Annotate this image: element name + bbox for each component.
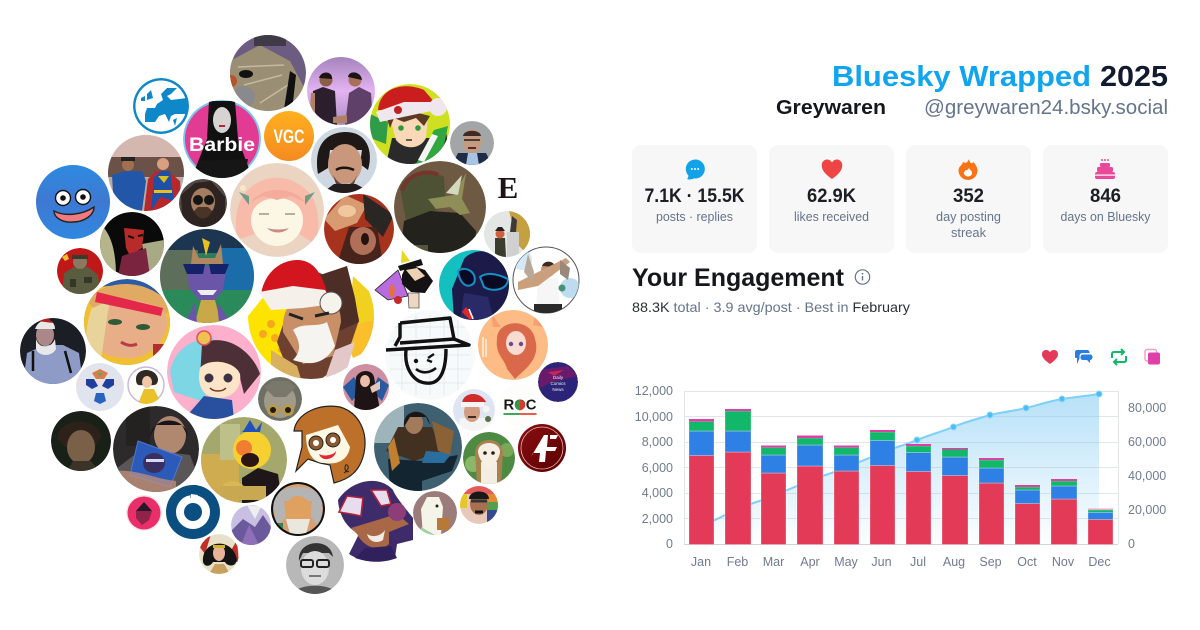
right axis labels [1128,401,1166,551]
panel: days on Bluesky [1043,145,1168,253]
avatar: grayscale person [286,536,344,594]
avatar: bearded man sunglasses [179,179,227,227]
left axis labels: 0 [666,537,673,551]
avatar: VGC [264,111,314,161]
avatar: Superman duo [108,135,184,211]
panel: posts and replies [632,145,757,253]
month labels: Aug [943,555,965,569]
avatar: pirate cartoon [375,250,433,308]
avatar: Miles Morales [338,481,413,562]
title: 2025 [1100,61,1168,93]
cumulative points [914,391,1102,443]
month labels: May [834,555,859,569]
handle: @greywaren24.bsky.social [924,97,1168,119]
avatar: wonder woman [199,534,239,574]
chart: engagement by month [635,384,1166,569]
avatar: VGC: VGC [273,127,305,148]
panel: avatar bubble cluster [20,35,580,594]
month labels: Jul [910,555,926,569]
heading: Your Engagement: Your Engagement [632,264,845,292]
avatar: Darth Vader sunglasses [439,250,509,320]
avatar: Barbie: Barbie [189,135,255,156]
avatar: red blurry photo [324,194,394,264]
avatar: yellow puppet [201,417,287,504]
month labels: Apr [800,555,820,569]
avatar: red demon [100,212,164,276]
stat value: 62.9K [807,186,856,207]
bar: Sep [979,458,1004,544]
avatar: old man anime [271,482,325,536]
avatar: ROC logo: ROC [504,398,537,414]
month labels [691,555,1111,569]
avatar: orange fox girl [478,310,548,380]
avatar: blue ring logo [166,485,220,539]
month labels: Jun [871,555,892,569]
right axis labels: 0 [1128,537,1135,551]
display name: Greywaren [776,97,886,119]
bar: Aug [942,448,968,544]
right axis labels: 80,000 [1128,401,1166,415]
avatar: Santa anime warrior [248,253,374,379]
bar: Dec [1088,508,1113,544]
icon: flame [958,159,978,180]
month labels: Dec [1088,555,1111,569]
avatar: hat doodle [386,315,471,395]
avatar: camo soldier [57,248,103,294]
avatar: E logo: E [498,170,518,205]
month labels: Mar [763,555,784,569]
avatar: manul cat [258,377,302,421]
left axis labels: 10,000 [635,410,673,424]
left axis labels: 8,000 [642,435,673,449]
panel: likes received [769,145,894,253]
avatar: brown hair cartoon [294,406,365,483]
avatar: Daily Comics News: Daily [553,375,564,380]
avatar: barn owl [463,432,515,484]
left axis labels: 4,000 [642,486,673,500]
stat value: 7.1K · 15.5K [644,186,745,207]
icon: reposts [1112,349,1126,365]
bar: Jun [870,430,895,544]
stat value: 846 [1090,186,1121,207]
bar: Feb [725,409,751,544]
month labels: Jan [691,555,711,569]
bar: Oct [1015,485,1040,544]
stat label line two: streak [951,226,987,240]
chart legend [1042,349,1160,365]
cumulative area [701,394,1099,544]
panel: day posting streak [906,145,1031,253]
icon: replies bubbles [1075,350,1092,364]
stat label: posts · replies [656,210,733,224]
left axis labels: 6,000 [642,461,673,475]
stat label: likes received [794,210,869,224]
stacked bars [689,409,1113,544]
avatar: Europe map [133,78,189,134]
avatar: Tangled [84,279,173,365]
icon: chat bubble [686,159,705,179]
icon: quotes [1145,350,1160,364]
avatar: Columbo [51,411,111,471]
avatar: comic lady small [127,366,165,404]
cumulative line [701,394,1099,527]
bar: Jan [689,419,714,544]
avatar: 4F logo [518,424,566,472]
icon: cake [1095,159,1115,179]
icon: likes heart [1042,350,1058,364]
avatar: Spyro [160,229,255,323]
icon: info [855,270,870,284]
avatar: Ben 10 [370,84,450,164]
avatar: purple illustration [231,505,271,545]
right axis labels: 40,000 [1128,469,1166,483]
left axis labels: 12,000 [635,384,673,398]
avatar: ice bear [413,491,457,535]
avatar: Friends headphones [113,406,199,492]
avatar: Ace chibi [167,325,261,419]
bar: Nov [1051,479,1077,544]
left axis labels: 2,000 [642,512,673,526]
bar: Mar [761,446,786,544]
avatar: santa man photo [453,389,495,431]
avatar: statue photo [484,211,530,258]
avatar: dark comic figure [374,403,462,491]
icon: heart [822,160,842,179]
bar: Jul [906,444,931,544]
avatar: Daily Comics News: Comics [550,381,566,386]
bar: Apr [797,436,823,544]
avatar: dark oil painting [394,161,486,253]
avatar: E logo [486,165,530,209]
avatar: Anya [230,163,324,257]
right axis labels: 20,000 [1128,503,1166,517]
avatar: santa stormtrooper [20,317,86,384]
avatar: glasses man suit [450,121,494,165]
title: Bluesky Wrapped [832,61,1091,93]
avatar: pink girl [343,364,389,410]
avatar: Daily Comics News [538,362,578,402]
engagement summary: 88.3K total · 3.9 avg/post · Best in February [632,299,910,315]
avatar: rainbow cube [76,363,124,411]
right axis labels: 60,000 [1128,435,1166,449]
stat label: day posting [936,210,1001,224]
avatar: Daily Comics News: News [552,387,564,392]
stat value: 352 [953,186,984,207]
bar: May [834,446,859,544]
avatar: ROC logo [499,384,541,426]
avatar: glasses man rainbow [460,486,498,524]
avatar: pink gem [126,495,162,531]
month labels: Oct [1017,555,1037,569]
month labels: Feb [727,555,748,569]
avatar: two men [307,57,375,125]
left axis labels [635,384,673,551]
stat label: days on Bluesky [1060,210,1151,224]
avatar: man with cats [512,247,580,314]
avatar: curly man [311,127,377,193]
avatar: mummy [225,35,306,111]
month labels: Sep [979,555,1002,569]
month labels: Nov [1052,555,1075,569]
avatar: blue slime [36,165,110,239]
avatar: Barbie [183,100,261,178]
